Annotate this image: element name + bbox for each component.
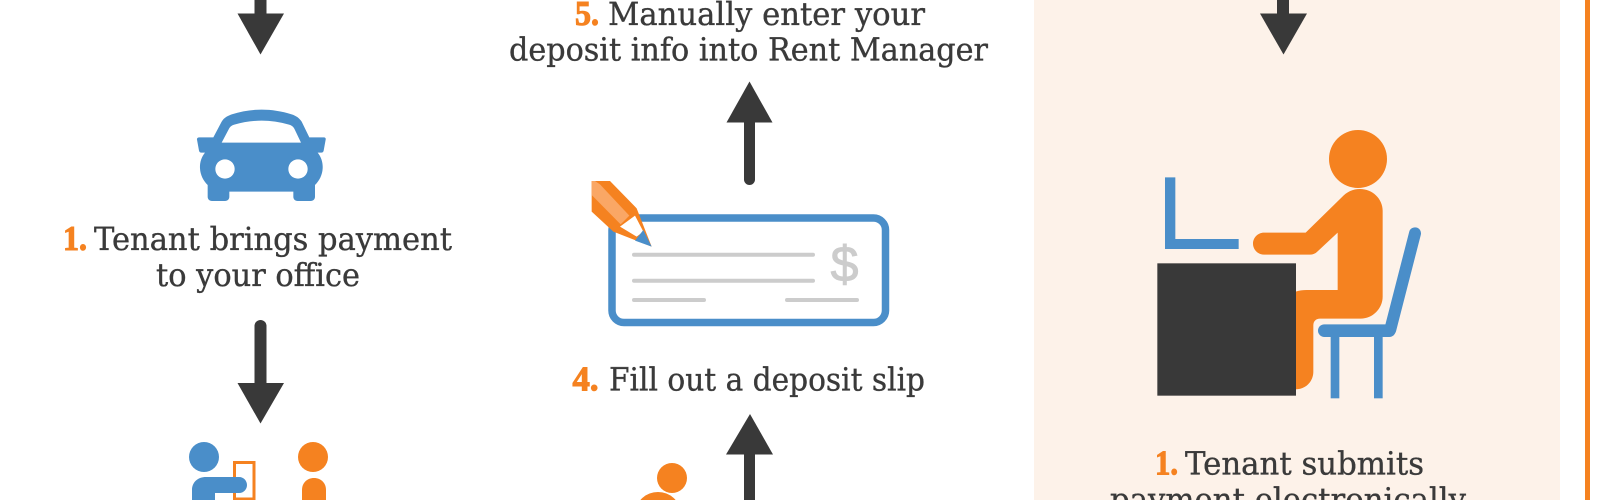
step text: tenant submits payment electronically: 1. (1155, 444, 1178, 482)
step text: fill out a deposit slip: Fill out a deposit slip (609, 360, 925, 398)
arrow: middle lower up (726, 414, 773, 500)
arrow: middle top up (726, 82, 772, 185)
step text: tenant brings payment (63, 219, 452, 294)
step text: tenant brings payment: 1. (63, 219, 87, 258)
icon: deposit slip with pencil (592, 181, 886, 322)
arrow: right panel down (1260, 0, 1307, 54)
icon: car (197, 110, 326, 201)
step text: manually enter deposit info: deposit info into Rent Manager (509, 30, 989, 68)
step text: tenant brings payment: to your office (156, 256, 360, 294)
right edge orange border (1585, 0, 1590, 500)
arrow: left lower down (238, 320, 284, 424)
step text: tenant brings payment: Tenant brings payment (94, 220, 452, 258)
step text: tenant submits payment electronically: Tenant submits (1185, 444, 1424, 482)
step text: manually enter deposit info (509, 0, 989, 68)
icon: deposit slip with pencil: $ (831, 236, 858, 292)
icon: tenant hands payment to manager (189, 442, 328, 500)
step text: fill out a deposit slip: 4. (572, 360, 598, 398)
icon: tenant at computer desk (1157, 130, 1415, 398)
step text: tenant submits payment electronically (1110, 444, 1466, 500)
panel: electronic payment background (1034, 0, 1560, 500)
arrow: left top down (238, 0, 284, 54)
icon: person walking to bank (636, 463, 687, 500)
